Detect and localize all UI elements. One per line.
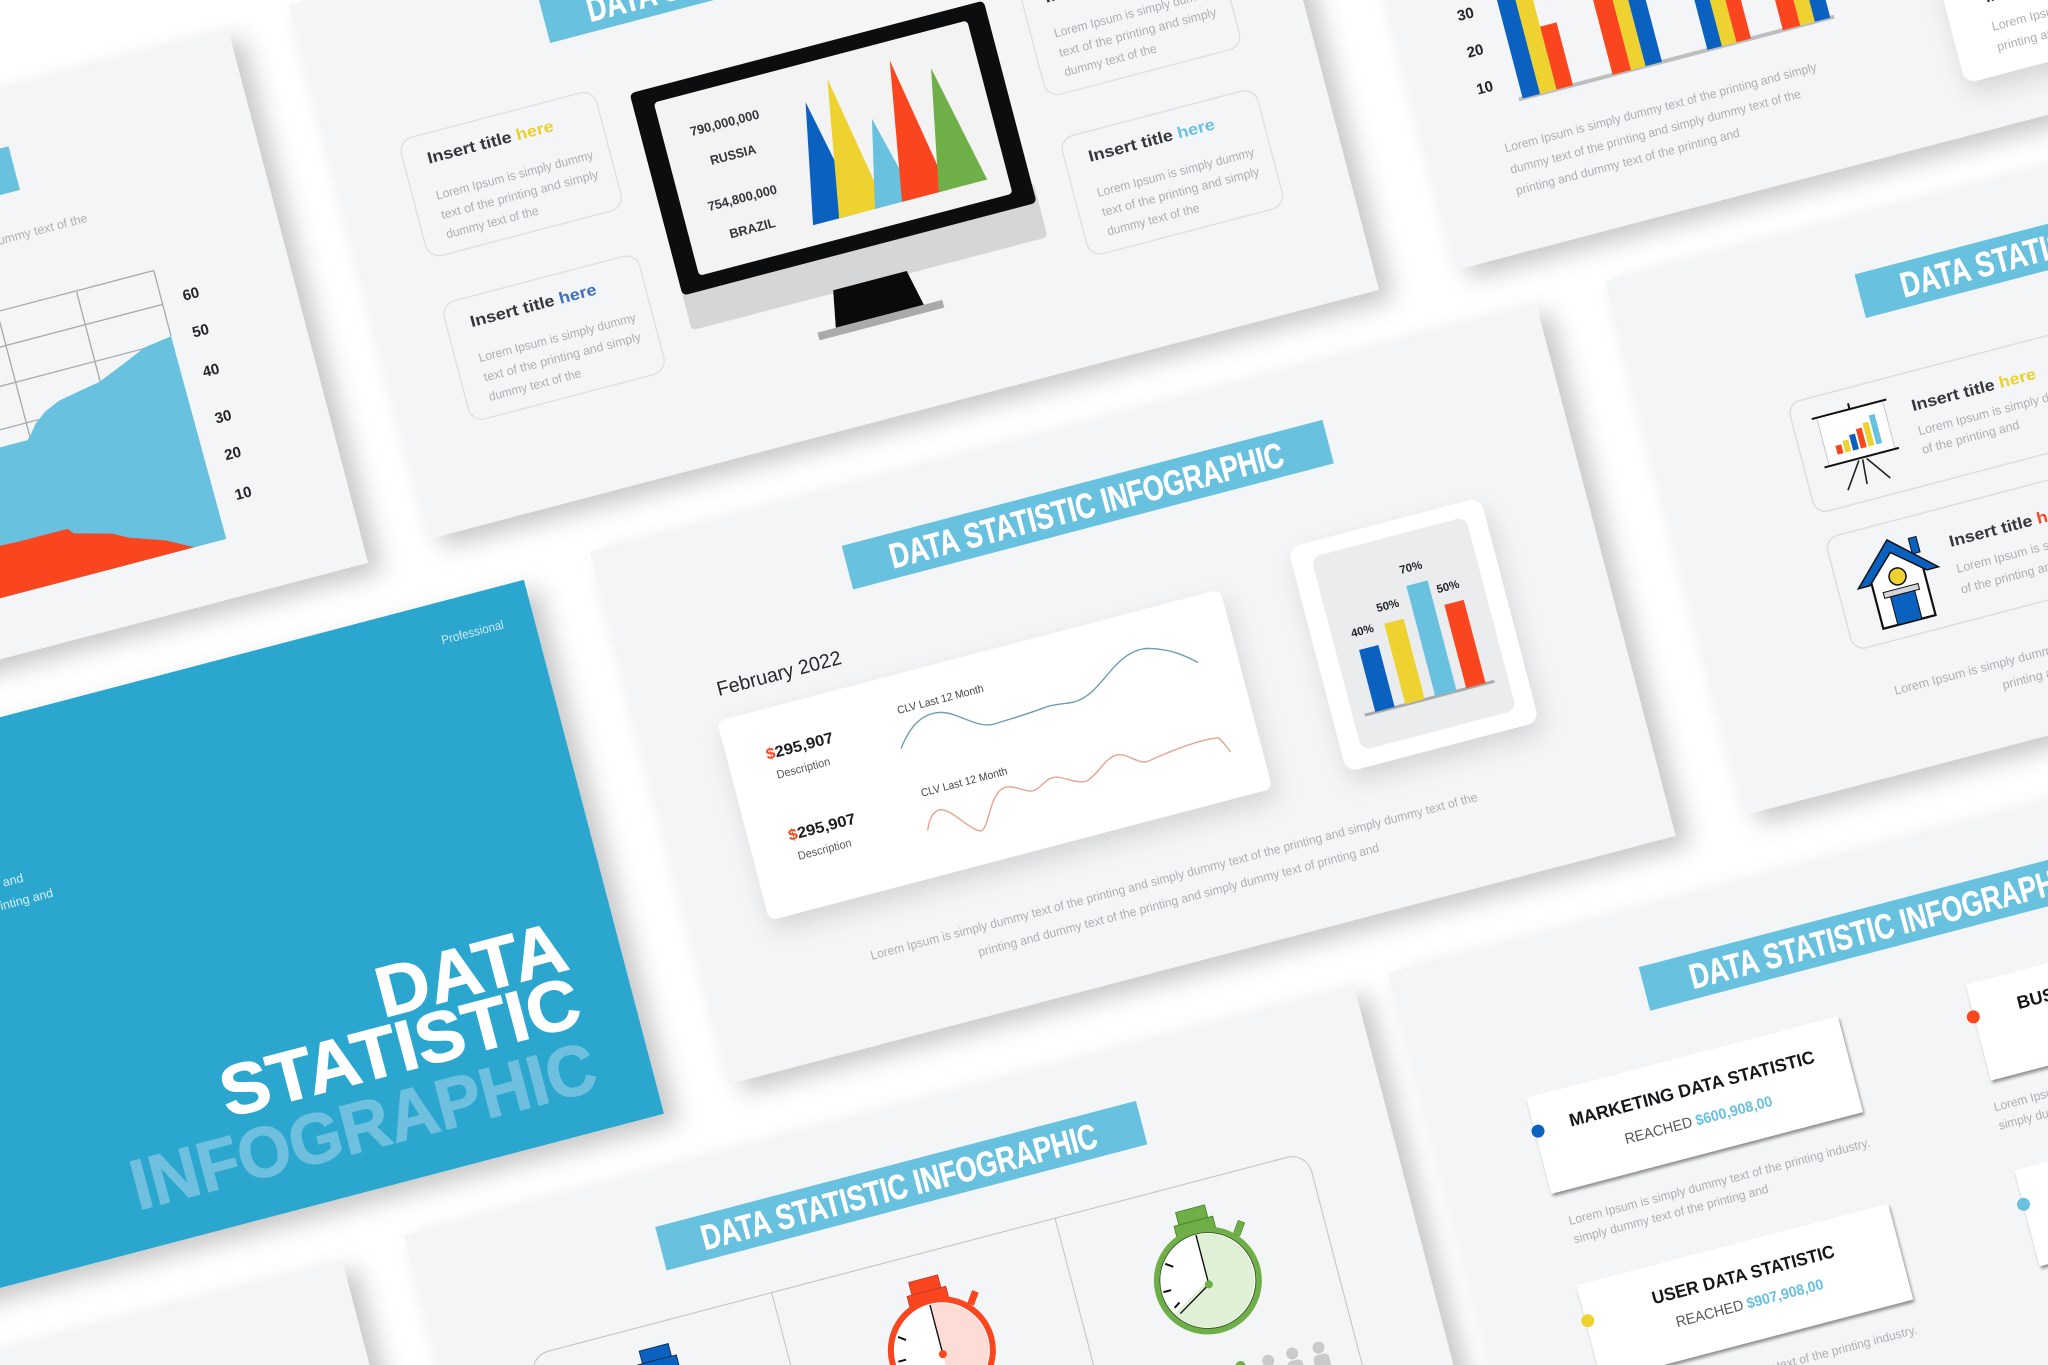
- icon: red stopwatch: [874, 1266, 1004, 1365]
- monitor: BRAZIL: [728, 215, 777, 241]
- axis labels: [1455, 4, 1495, 99]
- cover title: DATA: [367, 908, 575, 1033]
- card: marketing: [1523, 1016, 1863, 1195]
- stat: second value: Description: [797, 837, 853, 863]
- text box bottom right: dummy text of the: [1106, 201, 1201, 239]
- axis labels: 50: [190, 321, 211, 341]
- card: user: [1572, 1204, 1913, 1365]
- text box top right: [1016, 0, 1243, 98]
- body text: dummy text of the printing and simply dummy text of the: [1509, 87, 1802, 177]
- heading band: [1855, 148, 2048, 318]
- text box bottom right: [1059, 88, 1286, 257]
- axis labels: 40: [201, 360, 221, 381]
- text box bottom left: Lorem Ipsum is simply dummy: [477, 310, 638, 365]
- card: bar chart tile: [1288, 497, 1539, 772]
- text box bottom left: Insert title here: [468, 282, 599, 331]
- monitor: [630, 0, 1058, 371]
- text box bottom left: dummy text of the: [487, 366, 583, 404]
- chart: red line: CLV Last 12 Month: [920, 765, 1009, 800]
- text box bottom right: Insert title here: [1087, 116, 1217, 166]
- text box bottom right: text of the printing and simply: [1100, 164, 1261, 219]
- item box 1: of the printing and: [1920, 418, 2021, 457]
- card: user: REACHED $907,908,00: [1674, 1276, 1825, 1331]
- heading band: [842, 420, 1334, 589]
- slide: stopwatches: [404, 986, 1494, 1365]
- slide: data statistic cards: [1388, 724, 2048, 1365]
- area chart: [0, 270, 226, 628]
- axis labels: 10: [1475, 78, 1495, 99]
- card: marketing: REACHED $600,908,00: [1623, 1093, 1774, 1148]
- body text: Lorem Ipsum is simply dummy text of the printing and simply dummy text of the printing and simply dummy text of the: [869, 790, 1479, 963]
- axis labels: [181, 284, 254, 504]
- text box top right: dummy text of the: [1063, 42, 1158, 79]
- item box 1: Insert title here: [1910, 366, 2038, 415]
- heading band: [0, 146, 20, 316]
- axis labels: 20: [223, 444, 243, 464]
- stat: first value: Description: [775, 756, 832, 782]
- bar chart: 50%: [1435, 579, 1461, 596]
- text box bottom left: [441, 253, 667, 422]
- bar chart: [1472, 0, 1835, 101]
- slide: monitor: [289, 0, 1379, 539]
- card: user: USER DATA STATISTIC: [1650, 1241, 1837, 1308]
- text box top left: dummy text of the: [445, 204, 540, 241]
- icon: presentation board: [1810, 394, 1906, 494]
- slide: bottom left (blank edge): [0, 1260, 482, 1365]
- text box top left: Insert title here: [426, 118, 556, 168]
- card: line charts: [717, 589, 1272, 921]
- chart: blue line: CLV Last 12 Month: [896, 683, 985, 717]
- monitor: 754,800,000: [706, 182, 778, 214]
- axis labels: 60: [181, 284, 201, 305]
- axis labels: 10: [233, 483, 254, 504]
- item box 1: [1787, 228, 2048, 514]
- body text: printing and dummy text of the printing and simply dummy text of printing and: [977, 841, 1381, 959]
- text box bottom right: Lorem Ipsum is simply dummy: [1095, 145, 1256, 200]
- card: marketing: MARKETING DATA STATISTIC: [1567, 1047, 1817, 1130]
- heading band: [655, 1101, 1147, 1271]
- bar chart: [1330, 549, 1495, 717]
- cover title: [91, 908, 607, 1226]
- heading band: DATA STATISTIC INFOGRAPHIC: [885, 436, 1288, 576]
- card: business: [1959, 903, 2048, 1082]
- body text: Lorem Ipsum is simply dummy text of the printing and simply: [1503, 60, 1819, 155]
- axis labels: 20: [1465, 41, 1485, 62]
- text: marketing: Lorem Ipsum is simply dummy text of the printing industry.: [1567, 1136, 1872, 1228]
- text box bottom left: text of the printing and simply: [482, 330, 643, 384]
- card: fourth: [2008, 1089, 2048, 1268]
- monitor: RUSSIA: [708, 141, 758, 168]
- slide: centre line charts: [590, 304, 1676, 1084]
- white card: [1935, 0, 2048, 84]
- body text: [1503, 60, 1830, 198]
- text box top left: text of the printing and simply: [440, 167, 601, 222]
- icon: house: [1848, 529, 1950, 632]
- stat: first value: [764, 730, 840, 783]
- monitor: 790,000,000: [688, 107, 761, 139]
- date heading: February 2022: [714, 647, 844, 701]
- label: professional: Professional: [440, 618, 505, 647]
- bar chart: 40%: [1350, 623, 1375, 640]
- stat: second value: [787, 811, 863, 864]
- stat: second value: $295,907: [787, 811, 858, 845]
- item box 2: [1825, 363, 2048, 651]
- text box top left: [398, 90, 624, 259]
- axis labels: 30: [1455, 4, 1476, 25]
- axis labels: 30: [213, 407, 233, 428]
- text box top left: Lorem Ipsum is simply dummy: [434, 148, 595, 203]
- heading band: [539, 0, 1031, 43]
- icon: blue stopwatch: [603, 1335, 734, 1365]
- icon: green stopwatch: [1140, 1196, 1270, 1343]
- slide: area chart: [0, 29, 368, 812]
- bar chart: 50%: [1375, 598, 1401, 615]
- chart: red line: [917, 709, 1234, 844]
- cover title: STATISTIC: [212, 963, 589, 1133]
- bar chart: 70%: [1398, 559, 1424, 577]
- heading band: DATA STATISTIC INFOGRAPHIC: [697, 1117, 1101, 1258]
- body text: printing and dummy text of the printing and: [1514, 126, 1741, 198]
- icon: people row: [1233, 1339, 1334, 1365]
- chart: blue line: [890, 628, 1200, 749]
- text box top right: text of the printing and simply: [1058, 5, 1219, 60]
- stat: first value: $295,907: [764, 730, 835, 764]
- outlined frame: [529, 1152, 1390, 1365]
- text: marketing: simply dummy text of the printing and: [1572, 1182, 1770, 1246]
- slide: bar chart: [1316, 0, 2048, 270]
- slide: cover: [0, 580, 664, 1363]
- slide: presentation and house: [1605, 32, 2048, 815]
- cover title: INFOGRAPHIC: [122, 1028, 605, 1226]
